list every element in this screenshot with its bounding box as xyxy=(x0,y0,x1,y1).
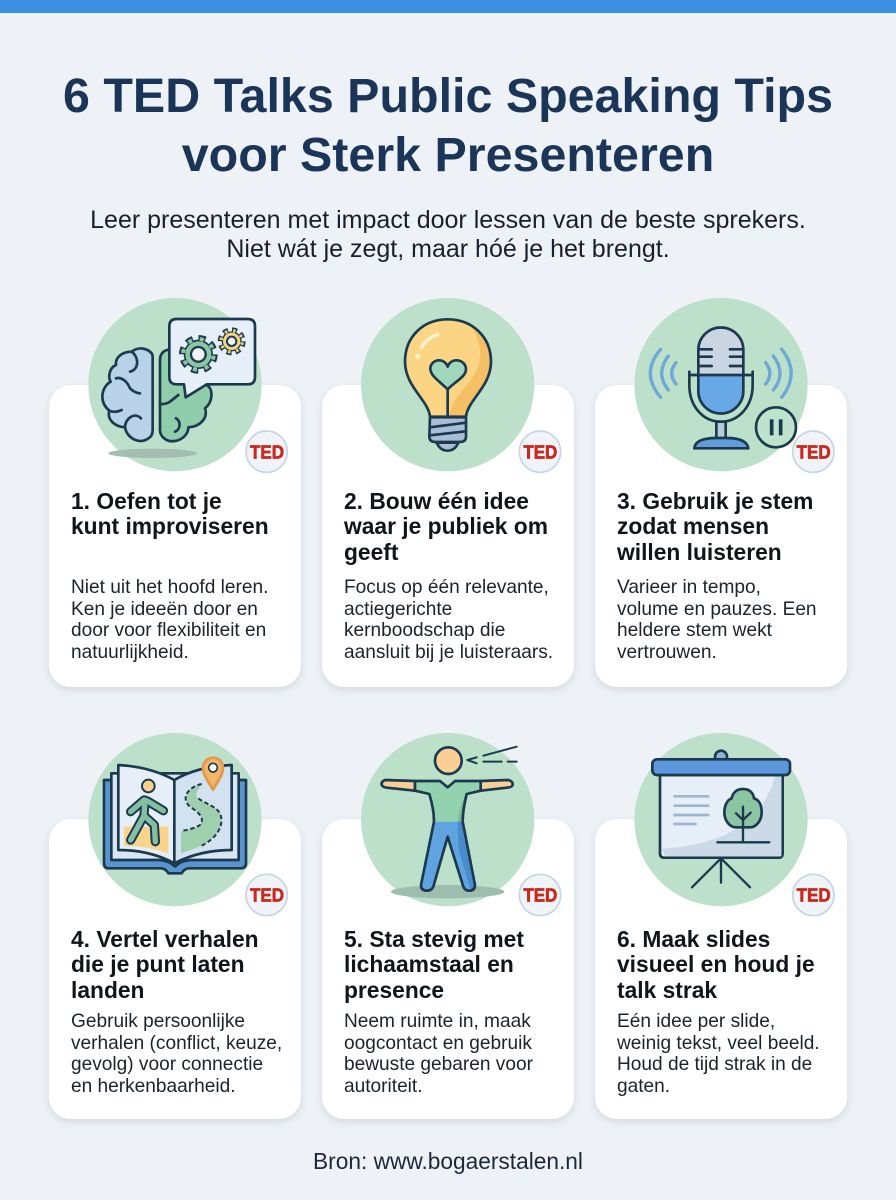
heading xyxy=(617,488,813,565)
heading: 5. Sta stevig met xyxy=(344,926,524,952)
body text: actiegerichte xyxy=(344,599,452,620)
heading: landen xyxy=(71,977,144,1003)
body text: Ken je ideeën door en xyxy=(71,599,258,620)
icon: TED badge xyxy=(519,431,561,472)
heading: die je punt laten xyxy=(71,951,245,977)
panel: tip 5 xyxy=(320,733,576,1124)
body text: Focus op één relevante, xyxy=(344,577,549,598)
body text: Niet uit het hoofd leren. xyxy=(71,577,268,598)
heading: 4. Vertel verhalen xyxy=(71,926,259,952)
body text xyxy=(344,577,553,663)
heading: 1. Oefen tot je xyxy=(71,488,222,514)
heading: talk strak xyxy=(617,977,717,1003)
icon: TED badge xyxy=(519,874,561,916)
heading xyxy=(344,488,548,565)
body text: gaten. xyxy=(617,1076,670,1097)
panel: tip 3 xyxy=(592,298,850,692)
body text xyxy=(617,577,817,663)
icon: TED badge xyxy=(246,874,287,916)
subtitle xyxy=(90,206,806,263)
source line: Bron: www.bogaerstalen.nl xyxy=(313,1148,583,1174)
heading xyxy=(617,926,815,1003)
icon: light bulb with heart xyxy=(361,298,562,474)
heading: lichaamstaal en xyxy=(344,951,514,977)
icon: TED badge xyxy=(246,431,287,472)
title: 6 TED Talks Public Speaking Tips xyxy=(63,69,833,123)
heading xyxy=(71,488,269,539)
heading: presence xyxy=(344,977,444,1003)
icon: person standing with open arms xyxy=(361,733,562,916)
body text: Eén idee per slide, xyxy=(617,1011,775,1032)
heading xyxy=(344,926,524,1003)
panel: tip 4 xyxy=(46,733,304,1124)
icon: TED badge: TED xyxy=(797,441,831,462)
body text: Neem ruimte in, maak xyxy=(344,1011,531,1032)
title xyxy=(63,69,833,182)
body text xyxy=(617,1011,820,1097)
icon: TED badge xyxy=(793,874,834,916)
body text: en herkenbaarheid. xyxy=(71,1076,236,1097)
icon: TED badge: TED xyxy=(797,885,831,906)
body text: Houd de tijd strak in de xyxy=(617,1054,812,1075)
body text: gevolg) voor connectie xyxy=(71,1054,263,1075)
body text: oogcontact en gebruik xyxy=(344,1033,532,1054)
icon: TED badge: TED xyxy=(250,441,284,462)
panel: tip 6 xyxy=(592,733,850,1124)
heading: geeft xyxy=(344,539,398,565)
icon: TED badge: TED xyxy=(523,441,557,462)
icon: TED badge: TED xyxy=(250,885,284,906)
body text: natuurlijkheid. xyxy=(71,642,189,663)
heading: zodat mensen xyxy=(617,513,769,539)
heading: 2. Bouw één idee xyxy=(344,488,529,514)
icon: brain with speech bubble and gears xyxy=(88,298,288,474)
icon: open book with walker and map path xyxy=(88,733,288,916)
icon: TED badge xyxy=(793,431,834,472)
icon: TED badge: TED xyxy=(523,885,557,906)
body text xyxy=(344,1011,533,1097)
heading xyxy=(71,926,259,1003)
body text xyxy=(71,1011,282,1097)
heading: visueel en houd je xyxy=(617,951,815,977)
body text: vertrouwen. xyxy=(617,642,717,663)
body text: kernboodschap die xyxy=(344,620,505,641)
body text xyxy=(71,577,268,663)
body text: verhalen (conflict, keuze, xyxy=(71,1033,282,1054)
body text: autoriteit. xyxy=(344,1076,423,1097)
panel: tip 1 xyxy=(46,298,304,692)
heading: kunt improviseren xyxy=(71,513,269,539)
title: voor Sterk Presenteren xyxy=(182,128,714,182)
body text: volume en pauzes. Een xyxy=(617,599,817,620)
heading: waar je publiek om xyxy=(344,513,548,539)
subtitle: Niet wát je zegt, maar hóé je het brengt. xyxy=(226,235,670,263)
body text: Gebruik persoonlijke xyxy=(71,1011,245,1032)
icon: microphone with sound waves and pause xyxy=(634,298,835,474)
body text: door voor flexibiliteit en xyxy=(71,620,266,641)
subtitle: Leer presenteren met impact door lessen van de beste sprekers. xyxy=(90,206,806,234)
body text: weinig tekst, veel beeld. xyxy=(617,1033,820,1054)
heading: 3. Gebruik je stem xyxy=(617,488,813,514)
body text: Varieer in tempo, xyxy=(617,577,761,598)
heading: 6. Maak slides xyxy=(617,926,770,952)
panel: tip 2 xyxy=(320,298,576,692)
body text: heldere stem wekt xyxy=(617,620,772,641)
icon: projection screen with tree xyxy=(634,733,835,916)
body text: aansluit bij je luisteraars. xyxy=(344,642,553,663)
body text: bewuste gebaren voor xyxy=(344,1054,533,1075)
heading: willen luisteren xyxy=(617,539,782,565)
